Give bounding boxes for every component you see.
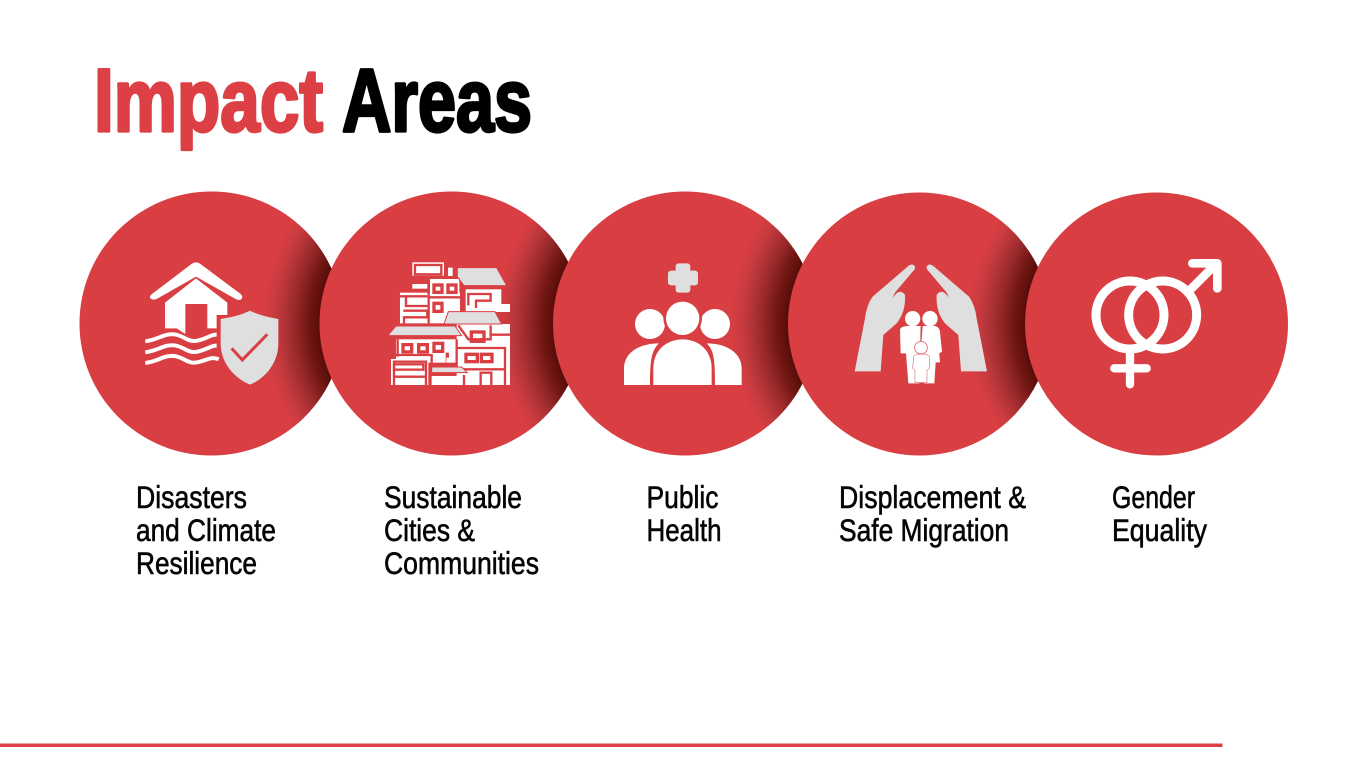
panel: sustainable cities and communities — [320, 192, 584, 581]
red circle with shadow — [553, 192, 817, 456]
label — [1112, 479, 1207, 548]
label — [384, 479, 539, 581]
label: Equality — [1112, 512, 1207, 548]
red circle with shadow — [788, 192, 1051, 456]
title: Impact — [94, 50, 323, 150]
label: and Climate — [136, 512, 276, 548]
red circle — [1025, 192, 1288, 456]
label: Safe Migration — [839, 512, 1009, 548]
title: Areas — [342, 50, 532, 150]
icon: people with medical cross — [624, 263, 742, 385]
panel: disasters and climate resilience — [80, 192, 344, 581]
title — [94, 50, 532, 150]
label — [839, 479, 1026, 548]
label — [646, 479, 722, 548]
icon: dense buildings — [388, 262, 510, 385]
red circle with shadow — [320, 192, 584, 456]
icon: hands sheltering a family — [855, 264, 987, 383]
label: Disasters — [136, 479, 247, 515]
label — [136, 479, 276, 581]
red circle with shadow — [80, 192, 344, 456]
label: Sustainable — [384, 479, 522, 515]
panel: gender equality — [1025, 192, 1288, 548]
icon: interlocked gender symbols — [1096, 263, 1217, 384]
label: Health — [646, 512, 722, 548]
panel: displacement and safe migration — [788, 192, 1051, 548]
label: Resilience — [136, 545, 257, 581]
label: Public — [646, 479, 718, 515]
footer rule — [0, 744, 1222, 747]
icon: flooded house and shield — [145, 262, 278, 385]
label: Communities — [384, 545, 539, 581]
label: Gender — [1112, 479, 1195, 515]
label: Displacement & — [839, 479, 1026, 515]
label: Cities & — [384, 512, 475, 548]
panel: public health — [553, 192, 817, 548]
